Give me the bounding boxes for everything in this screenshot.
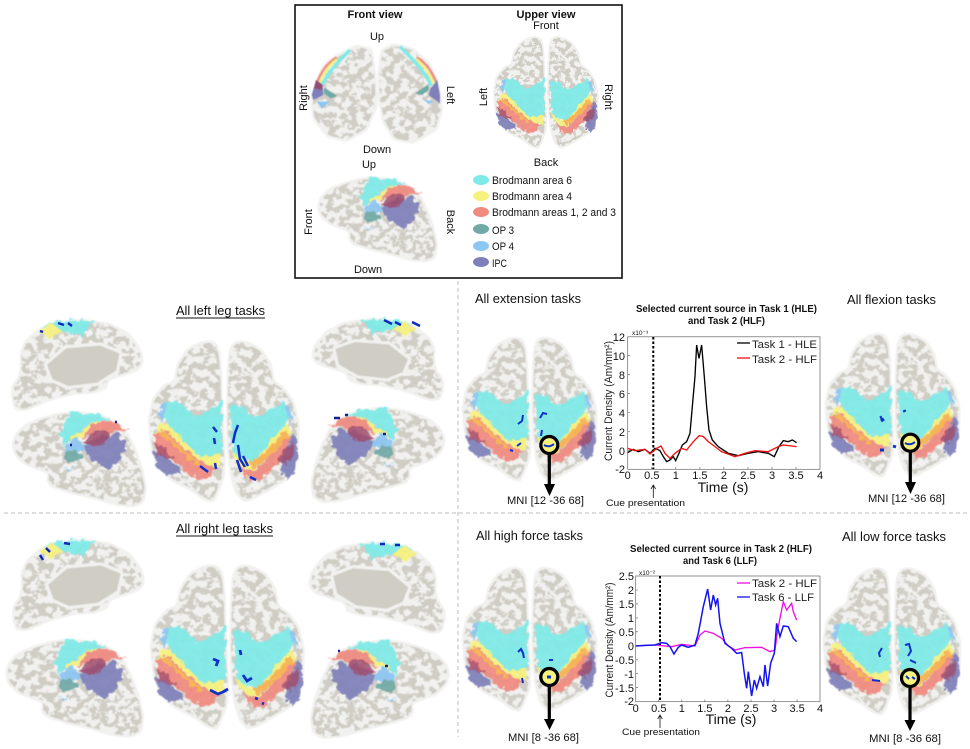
colour legend [473, 175, 616, 270]
heading: right leg: All right leg tasks [176, 522, 273, 536]
colour legend: Brodmann area 4 [492, 191, 572, 203]
chart title: Selected current source in Task 2 (HLF) [630, 544, 812, 555]
y axis ticks: -0.5 [615, 655, 634, 667]
chart legend: Task 2 - HLF [752, 354, 817, 366]
y axis ticks: 2 [619, 427, 625, 439]
cue annotation [606, 485, 685, 508]
panel: all right leg tasks [5, 522, 450, 739]
x axis ticks: 3.5 [788, 470, 804, 482]
chart legend: Task 2 - HLF [752, 578, 817, 590]
y axis ticks: -1 [624, 669, 634, 681]
x axis ticks: 4 [817, 703, 823, 715]
x axis ticks: 1 [673, 470, 679, 482]
marker: high force MNI source [541, 668, 558, 730]
x axis ticks: 3.5 [789, 703, 805, 715]
brain: high force [461, 566, 598, 712]
y axis ticks: 1.5 [619, 599, 634, 611]
x axis ticks: 3 [769, 470, 775, 482]
heading: all high force tasks: All high force tasks [476, 529, 583, 543]
marker: flexion MNI source [902, 434, 919, 494]
x axis ticks: 0.5 [644, 470, 659, 482]
lateral brains [5, 639, 450, 739]
series: task 1 HLE [628, 345, 797, 462]
chart title [630, 544, 812, 567]
legend panel [295, 5, 622, 278]
y axis ticks: 12 [613, 332, 625, 344]
x axis ticks [625, 470, 823, 482]
y axis ticks: -2 [615, 464, 625, 476]
panel: all left leg tasks [11, 304, 446, 508]
x axis ticks: 0 [625, 470, 631, 482]
colour legend: OP 4 [492, 241, 514, 253]
upper view brain [493, 36, 599, 149]
brain: low force [822, 567, 962, 716]
heading: all flexion tasks: All flexion tasks [847, 293, 936, 307]
cue annotation: Cue presentation [606, 498, 685, 508]
panel: high and low force [461, 529, 962, 745]
y axis ticks [615, 571, 634, 708]
cue marker [652, 337, 654, 469]
heading: all extension tasks: All extension tasks [475, 292, 581, 306]
orientation labels: Left [478, 88, 490, 106]
cue marker [659, 576, 661, 701]
chart legend [737, 578, 817, 604]
upper brain [148, 340, 300, 503]
exponent: x10⁻³ [632, 330, 649, 337]
chart title [636, 304, 817, 327]
front view brain [310, 43, 443, 144]
y axis ticks: 10 [613, 351, 625, 363]
cue annotation: Cue presentation [622, 727, 700, 737]
y axis ticks: 2 [628, 585, 634, 597]
orientation labels: Back [444, 210, 456, 235]
chart legend [737, 339, 817, 366]
y axis ticks: 0 [619, 446, 625, 458]
front view heading: Front view [348, 9, 403, 21]
medial brains [12, 539, 446, 634]
chart title: Selected current source in Task 1 (HLE) [636, 304, 817, 315]
orientation labels: Front [533, 20, 559, 32]
orientation labels: Back [534, 157, 559, 169]
colour legend: Brodmann area 6 [492, 175, 572, 187]
label: extension MNI: MNI [12 -36 68] [507, 495, 584, 507]
series: task 2 HLF [636, 602, 797, 652]
label: high force MNI: MNI [8 -36 68] [508, 732, 579, 744]
x axis ticks: 1 [679, 703, 685, 715]
x axis label: Time (s) [698, 479, 748, 495]
heading: all low force tasks: All low force tasks [842, 530, 946, 544]
colour legend: Brodmann areas 1, 2 and 3 [492, 207, 616, 219]
chart legend: Task 6 - LLF [752, 592, 814, 604]
x axis ticks: 2 [725, 703, 731, 715]
orientation labels: Down [354, 264, 382, 276]
label: flexion MNI: MNI [12 -36 68] [868, 493, 945, 505]
x axis ticks: 1.5 [697, 703, 713, 715]
orientation labels: Right [602, 84, 614, 110]
x axis label: Time (s) [706, 711, 756, 727]
label: low force MNI: MNI [8 -36 68] [869, 733, 941, 745]
y axis ticks: 1 [628, 613, 634, 625]
y axis label: Current Density (Am/mm²) [603, 341, 615, 461]
orientation labels: Up [370, 31, 384, 43]
medial brains [11, 318, 444, 411]
marker: low force MNI source [902, 670, 918, 731]
orientation labels: Front [303, 209, 315, 235]
series: task 2 HLF [628, 436, 797, 458]
y axis ticks [613, 332, 625, 476]
exponent: x10⁻² [639, 570, 656, 577]
brain: flexion [824, 332, 961, 478]
chart: task 2 vs task 6 [604, 544, 823, 737]
y axis ticks: 2.5 [619, 571, 634, 583]
x axis ticks: 1.5 [692, 470, 708, 482]
x axis ticks: 0.5 [651, 703, 666, 715]
chart title: and Task 2 (HLF) [688, 316, 765, 327]
x axis ticks [633, 703, 823, 715]
y axis ticks: 4 [619, 408, 625, 420]
chart title: and Task 6 (LLF) [683, 556, 757, 567]
heading: left leg: All left leg tasks [176, 304, 265, 318]
chart: task 1 vs task 2 [603, 304, 823, 508]
brain: extension [461, 336, 598, 482]
lateral view brain [317, 176, 438, 263]
orientation labels: Right [298, 85, 310, 111]
x axis ticks: 3 [771, 703, 777, 715]
y axis label: Current Density (Am/mm²) [604, 582, 616, 698]
y axis ticks: 0 [628, 641, 634, 653]
x axis ticks: 4 [817, 470, 823, 482]
marker: extension MNI source [541, 436, 558, 496]
y axis ticks: -2 [624, 696, 634, 708]
orientation labels: Up [362, 159, 376, 171]
orientation labels: Down [363, 144, 391, 156]
orientation labels [298, 20, 614, 276]
series: task 6 LLF [636, 589, 797, 696]
colour legend: OP 3 [492, 225, 514, 237]
upper brain [150, 564, 305, 731]
panel: extension and flexion [461, 292, 961, 507]
lateral brains [11, 407, 446, 508]
orientation labels: Left [444, 86, 456, 104]
y axis ticks: -1.5 [615, 683, 634, 695]
x axis ticks: 0 [633, 703, 639, 715]
colour legend: IPC [492, 258, 507, 270]
y axis ticks: 0.5 [619, 627, 634, 639]
x axis ticks: 2 [721, 470, 727, 482]
y axis ticks: 6 [619, 389, 625, 401]
chart legend: Task 1 - HLE [752, 339, 817, 351]
upper view heading: Upper view [516, 9, 576, 21]
cue annotation [622, 715, 700, 737]
y axis ticks: 8 [619, 370, 625, 382]
x axis ticks: 2.5 [740, 470, 756, 482]
x axis ticks: 2.5 [743, 703, 759, 715]
